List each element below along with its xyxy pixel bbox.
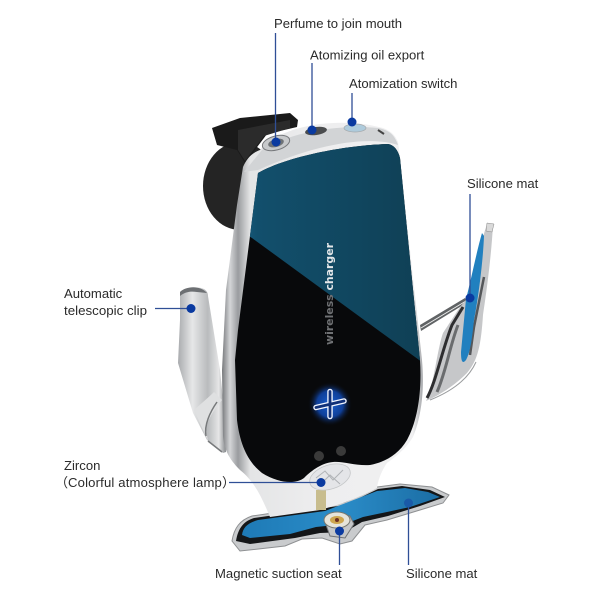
label: perfume to join mouth — [272, 16, 402, 146]
label: atomization switch — [348, 76, 457, 126]
magnetic suction seat — [324, 512, 354, 538]
label: atomization switch: Atomization switch — [349, 76, 457, 91]
label: zircon colorful atmosphere lamp: ） — [222, 475, 235, 490]
label: zircon colorful atmosphere lamp: Colorful atmosphere lamp — [68, 475, 222, 490]
phone holder silver body — [222, 123, 423, 517]
label: zircon colorful atmosphere lamp: （ — [55, 475, 68, 490]
label: silicone mat bottom: Silicone mat — [406, 566, 478, 581]
label: automatic telescopic clip: Automatic — [64, 286, 123, 301]
label: magnetic suction seat: Magnetic suction seat — [215, 566, 342, 581]
label: silicone mat right: Silicone mat — [467, 176, 539, 191]
label: zircon colorful atmosphere lamp: Zircon — [64, 458, 100, 473]
charger glass panel — [235, 144, 420, 482]
silicone mat base — [232, 484, 449, 551]
label: perfume to join mouth: Perfume to join mouth — [274, 16, 402, 31]
label: silicone mat right — [466, 176, 539, 302]
label: automatic telescopic clip: telescopic clip — [64, 303, 147, 318]
label: automatic telescopic clip — [64, 286, 196, 318]
wireless charger vertical text: wireless charger — [323, 242, 336, 345]
label: zircon colorful atmosphere lamp — [55, 458, 326, 490]
label: magnetic suction seat — [215, 526, 344, 581]
top buttons — [261, 124, 384, 153]
left telescopic clip — [178, 287, 226, 453]
car vent mount — [203, 113, 298, 230]
label: silicone mat bottom — [404, 498, 478, 581]
zircon crystal lamp — [306, 459, 354, 495]
right silicone clip arm — [420, 223, 494, 401]
label: atomizing oil export — [308, 48, 425, 134]
wireless charging plus icon — [308, 382, 352, 426]
label: atomizing oil export: Atomizing oil export — [310, 48, 425, 62]
indicator dots — [314, 446, 346, 461]
